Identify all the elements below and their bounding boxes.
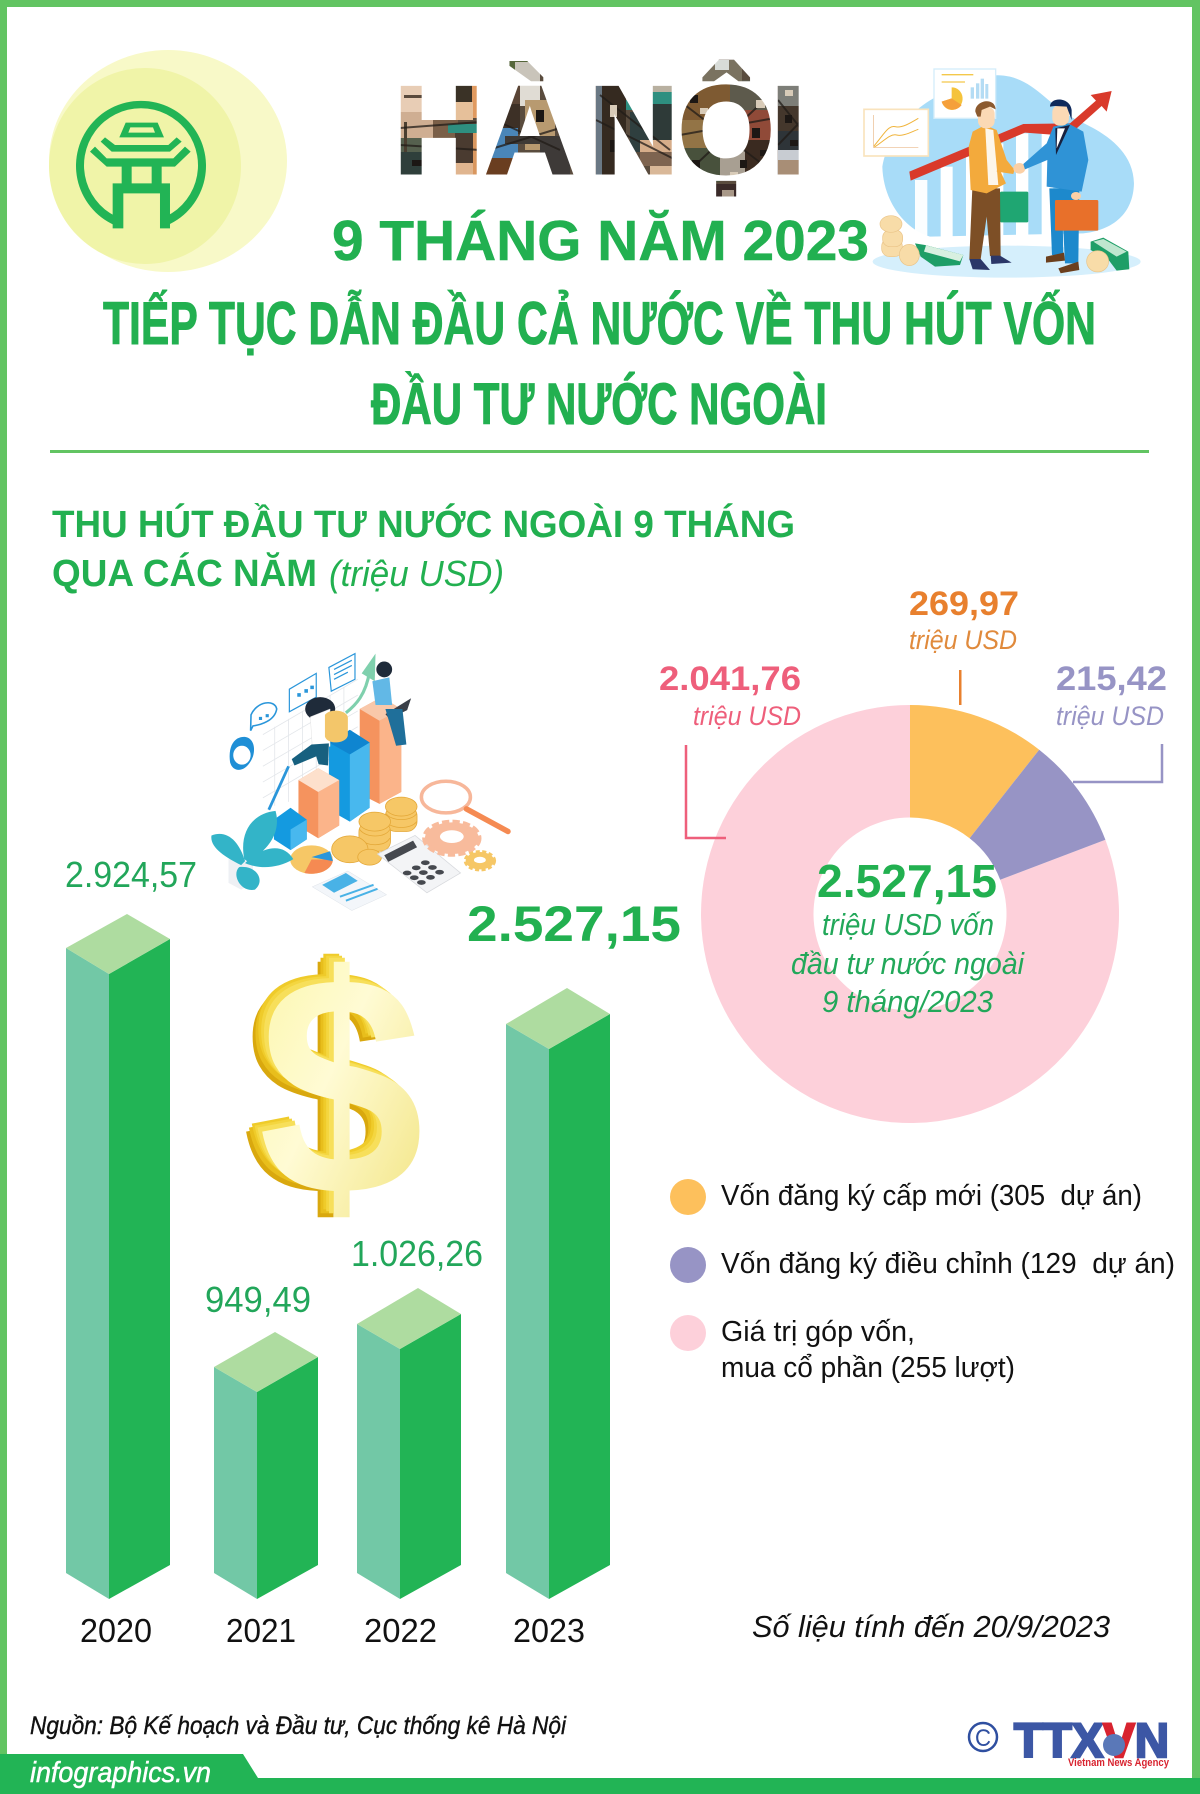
- calculator: [378, 835, 461, 893]
- document: [312, 871, 387, 911]
- callout: new registered capital: 269,97: [909, 585, 1019, 623]
- donut centre text: 9 tháng/2023: [822, 984, 993, 1019]
- callout: adjusted capital: triệu USD: [1056, 701, 1164, 731]
- callout: capital contribution: 2.041,76: [659, 660, 801, 698]
- bar value labels: [65, 854, 483, 1320]
- logo: Hanoi emblem: [49, 50, 287, 272]
- year labels: [80, 1612, 585, 1649]
- legend: Giá trị góp vốn,: [721, 1316, 915, 1348]
- legend: Vốn đăng ký điều chỉnh (129 dự án): [721, 1248, 1175, 1280]
- figures: [292, 662, 411, 765]
- icon: gold dollar sign: $: [258, 911, 424, 1261]
- callout: adjusted capital: [1056, 660, 1167, 782]
- coins: [332, 797, 417, 865]
- donut centre text: triệu USD vốn: [822, 907, 994, 942]
- gears: [425, 822, 494, 869]
- logo: TTXVN: C: [975, 1725, 991, 1752]
- figure: man in yellow jacket: [969, 101, 1028, 270]
- footer bar with site tab: [0, 1754, 1200, 1794]
- note: data date: Số liệu tính đến 20/9/2023: [752, 1609, 1110, 1644]
- highlighted 2023 value: 2.527,15: [467, 896, 681, 952]
- illustration: business handshake: [864, 69, 1141, 278]
- illustration: isometric finance scene: [211, 654, 508, 911]
- section heading: THU HÚT ĐẦU TƯ NƯỚC NGOÀI 9 THÁNG: [52, 502, 795, 546]
- donut centre text: đầu tư nước ngoài: [791, 946, 1025, 981]
- headline: ĐẦU TƯ NƯỚC NGOÀI: [371, 372, 827, 437]
- year labels: 2023: [513, 1612, 585, 1649]
- source: Nguồn: Bộ Kế hoạch và Đầu tư, Cục thống kê Hà Nội: [30, 1712, 567, 1740]
- section heading: [52, 502, 795, 595]
- bar value labels: 949,49: [205, 1279, 311, 1320]
- year labels: 2022: [364, 1612, 437, 1649]
- bar 2023: [506, 988, 610, 1599]
- bar value labels: 2.924,57: [65, 854, 197, 895]
- donut centre text: [791, 855, 1025, 1019]
- legend: [670, 1179, 1175, 1384]
- magnifier: [421, 781, 508, 831]
- chart: donut of 2023 capital: [659, 585, 1167, 1123]
- bar value labels: 1.026,26: [351, 1233, 483, 1274]
- section heading: QUA CÁC NĂM: [52, 551, 317, 595]
- headline: [103, 290, 1096, 437]
- subtitle: 9 tháng năm 2023: 9 THÁNG NĂM 2023: [332, 209, 869, 273]
- legend: mua cổ phần (255 lượt): [721, 1352, 1015, 1384]
- year labels: 2021: [226, 1612, 296, 1649]
- pie: [290, 845, 333, 874]
- bar 2021: [214, 1332, 318, 1599]
- icon: gold dollar sign: $: [242, 911, 408, 1261]
- logo: TTXVN: Vietnam News Agency: [1068, 1757, 1170, 1769]
- bar 2020: [66, 914, 170, 1599]
- icon: gold dollar sign: $: [248, 903, 413, 1253]
- callout: new registered capital: [909, 585, 1019, 705]
- legend: Vốn đăng ký cấp mới (305 dự án): [721, 1180, 1142, 1212]
- callout: capital contribution: [659, 660, 801, 838]
- logo: TTXVN: TTXVN: [1014, 1715, 1169, 1768]
- chart: 3D bars by year: [65, 854, 681, 1649]
- donut centre text: 2.527,15: [817, 855, 997, 907]
- icon: gold dollar sign: $: [254, 907, 419, 1257]
- icon: coins and banknotes: [880, 216, 1129, 272]
- footer bar with site tab: infographics.vn: [30, 1757, 211, 1789]
- section heading: (triệu USD): [329, 553, 504, 594]
- plant: [211, 811, 293, 890]
- callout: capital contribution: triệu USD: [693, 701, 801, 731]
- title: HÀ NỘI: HÀ NỘI: [394, 61, 805, 200]
- callout: adjusted capital: 215,42: [1056, 660, 1167, 698]
- callout: new registered capital: triệu USD: [909, 625, 1017, 655]
- icon: gold dollar sign: $: [245, 907, 410, 1257]
- icon: gold dollar sign: $: [251, 905, 416, 1255]
- figure: man in blue suit: [1023, 100, 1098, 273]
- bars: [274, 697, 401, 850]
- bar 2022: [357, 1288, 461, 1599]
- year labels: 2020: [80, 1612, 152, 1649]
